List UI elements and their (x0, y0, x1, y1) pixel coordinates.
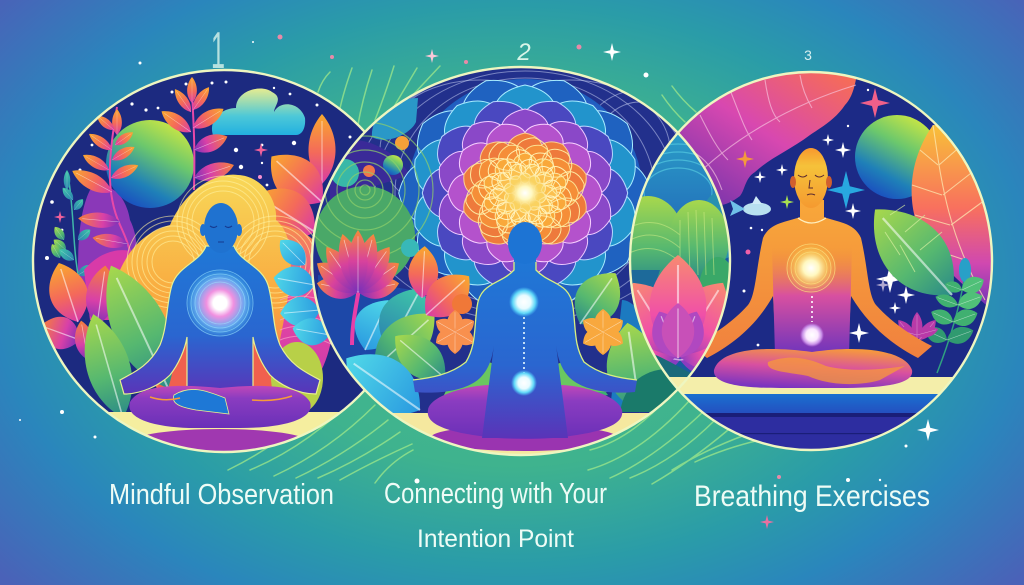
orange flower left (436, 310, 474, 354)
leaves: upper right orange (266, 114, 336, 236)
circle 1 outline (33, 70, 415, 452)
fish (730, 196, 771, 216)
red lotus plant (317, 230, 399, 345)
top-left pink leaf (650, 72, 857, 205)
chest glow (785, 242, 837, 294)
mat (432, 430, 614, 451)
label: connecting with your: Connecting with Your (384, 478, 607, 510)
cloud (212, 89, 305, 135)
figure: seated orange (692, 148, 932, 388)
infographic: 1 (211, 22, 225, 80)
green arcs behind legs (444, 360, 612, 395)
label: intention point: Intention Point (417, 525, 574, 553)
number 2: 2 (516, 39, 531, 66)
leaves and flowers left of figure (346, 246, 472, 413)
top mesh lines (368, 70, 676, 316)
panel: connecting with intention point circle (313, 68, 676, 454)
panel: breathing exercises circle (625, 68, 1000, 454)
upper back glow (509, 287, 539, 317)
lotus flower: sacred geometry (398, 79, 647, 301)
number 3: 3 (804, 47, 812, 63)
panel: mindful observation circle (34, 71, 364, 451)
figure: seated blue (120, 203, 320, 428)
lens base (625, 349, 700, 377)
lens: teal and green leaves with lotus (611, 125, 745, 427)
lower glow (800, 323, 824, 347)
purple background arcs (330, 140, 410, 200)
lower back glow (511, 370, 537, 396)
lens ground (625, 377, 735, 427)
circle outlines (312, 67, 992, 455)
leaves and flowers right of figure (574, 273, 676, 412)
spine energy line (523, 312, 525, 376)
aura rings (120, 175, 335, 395)
green domes (612, 191, 744, 335)
platform (625, 377, 997, 454)
orbs (331, 136, 409, 187)
label: breathing exercises: Breathing Exercises (694, 480, 930, 513)
leaves: left colourful (44, 263, 110, 358)
mat (147, 429, 298, 451)
sprig: top centre leaves (157, 77, 236, 190)
left teal blob (372, 98, 418, 140)
green leaf (852, 189, 975, 316)
cyan leaves right (274, 240, 328, 346)
stars (736, 88, 915, 346)
background sparkles (19, 34, 939, 529)
green dome (314, 122, 434, 276)
large right leaf (912, 125, 1000, 310)
sprig: upper left leaves (72, 106, 138, 251)
magenta base leaf (84, 250, 130, 320)
teal waves (618, 130, 738, 240)
figure: seated from behind (413, 222, 637, 439)
energy dotted line (811, 296, 813, 322)
orange flower right (583, 309, 623, 355)
planet (855, 115, 939, 199)
lime bush (271, 342, 323, 414)
planet (106, 120, 194, 208)
lotus (611, 255, 745, 379)
starry dots (45, 80, 352, 260)
fern (922, 258, 987, 373)
dark blue base leaves left (318, 275, 410, 366)
leaves: small teal sprig left (51, 170, 90, 276)
chest glow (186, 269, 254, 337)
ground (393, 413, 649, 454)
leaves: large green (84, 266, 172, 412)
ground (109, 412, 339, 436)
grass strokes (228, 66, 760, 484)
purple background blob (78, 186, 137, 292)
small pink plant (894, 312, 940, 343)
label: mindful observation: Mindful Observation (109, 479, 334, 511)
